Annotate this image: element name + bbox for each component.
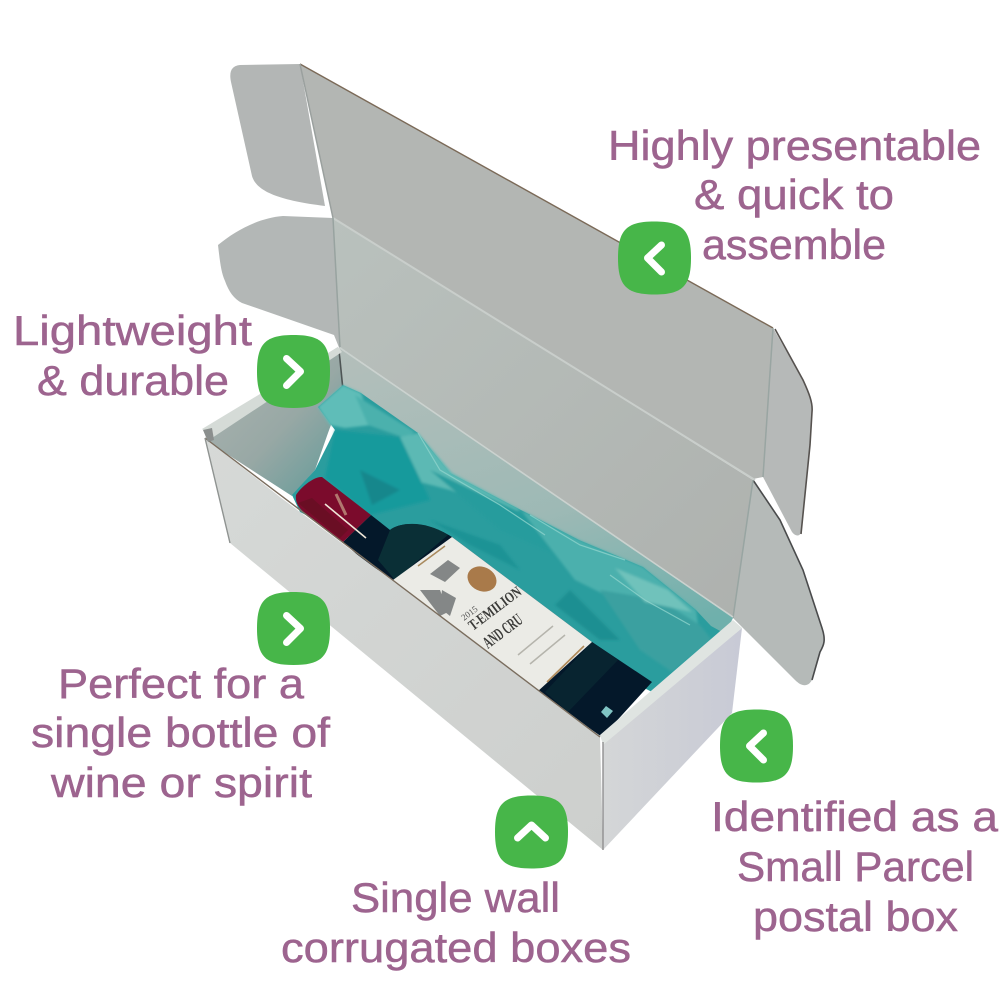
icon: up chevron button, single wall: [495, 796, 568, 868]
rear inner wall: [340, 347, 733, 690]
label: lightweight and durable: Lightweight: [13, 307, 252, 354]
upper left lid flap: [230, 64, 325, 206]
label: perfect for a single bottle: wine or spirit: [50, 759, 312, 806]
label: single wall corrugated: [281, 874, 631, 971]
red foil capsule: [296, 477, 371, 542]
label: identified as small parcel: postal box: [753, 893, 958, 940]
tissue crease highlights: [418, 433, 690, 625]
label: perfect for a single bottle: single bottle of: [31, 709, 330, 756]
label: single wall corrugated: corrugated boxes: [281, 924, 631, 971]
lower left lid flap: [218, 216, 340, 350]
tissue base: [292, 385, 722, 692]
label: highly presentable: [608, 122, 981, 268]
open postal box with wine bottle: [202, 64, 824, 850]
label: highly presentable: & quick to: [694, 171, 894, 218]
label: perfect for a single bottle: [31, 660, 330, 806]
lower right lid flap: [733, 480, 824, 685]
upper right lid flap: [763, 328, 812, 536]
label: identified as small parcel: Small Parcel: [737, 843, 974, 890]
right end rim: [600, 620, 742, 745]
teal tissue paper: [292, 385, 722, 692]
bottle glass: [343, 515, 652, 737]
back left rim: [202, 347, 342, 438]
label: single wall corrugated: Single wall: [351, 874, 560, 921]
label: identified as small parcel: Identified as a: [711, 793, 999, 840]
wine label: AND CRU: [479, 610, 526, 652]
wax seal: [463, 562, 501, 596]
label: lightweight and durable: & durable: [37, 357, 229, 404]
label: lightweight and durable: [13, 307, 252, 404]
icon: right chevron button, lightweight: [257, 335, 330, 408]
vintage: 2015: [459, 603, 480, 623]
label: highly presentable: Highly presentable: [608, 122, 981, 169]
left inner wall: [205, 347, 343, 496]
label illustration: [420, 560, 460, 616]
upper lid panel: [300, 64, 773, 479]
right end wall: [603, 628, 742, 850]
wine bottle: [296, 477, 652, 737]
label: highly presentable: assemble: [702, 221, 886, 268]
label fine print: [518, 626, 565, 664]
icon: right chevron button, perfect for: [257, 592, 330, 665]
bottle base sticker: [601, 706, 613, 718]
lower lid panel: [333, 218, 753, 618]
label: identified as small parcel: [711, 793, 999, 940]
label: perfect for a single bottle: Perfect for a: [58, 660, 305, 707]
tissue facets: [318, 385, 712, 672]
front side wall: [205, 438, 603, 850]
wine label: [393, 537, 592, 692]
icon: left chevron button, identified: [720, 710, 793, 782]
label name: T-EMILION: [466, 584, 525, 634]
icon: left chevron button, top: [618, 222, 691, 294]
